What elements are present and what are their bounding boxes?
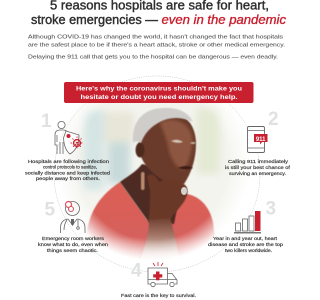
number 5: 5 bbox=[44, 200, 56, 220]
icon: ambulance bbox=[148, 262, 177, 287]
text: Year in and year out, heart bbox=[213, 236, 278, 242]
text: things seem chaotic. bbox=[47, 248, 98, 254]
text: surviving an emergency. bbox=[229, 171, 286, 177]
face highlight bbox=[160, 120, 192, 170]
text: know what to do, even when bbox=[38, 242, 108, 248]
reason 4 bbox=[121, 260, 196, 299]
ear bbox=[136, 142, 144, 158]
reason 2 bbox=[225, 109, 291, 177]
text: Emergency room workers bbox=[42, 236, 105, 242]
text: control protocols to sanitize, bbox=[43, 165, 97, 171]
text bbox=[38, 236, 108, 254]
text: Fast care is the key to survival. bbox=[121, 293, 196, 299]
intro text bbox=[28, 34, 285, 60]
reason 1 bbox=[25, 111, 110, 182]
shirt bbox=[86, 182, 218, 262]
intro text: Although COVID-19 has changed the world, it hasn't changed the fact that hospitals bbox=[28, 34, 283, 40]
earring bbox=[141, 172, 144, 190]
reason 3 bbox=[208, 198, 283, 254]
intro text: Delaying the 911 call that gets you to the hospital can be dangerous — even deadly. bbox=[28, 54, 278, 60]
text: Calling 911 immediately bbox=[228, 159, 289, 165]
icon: bar chart bbox=[234, 211, 261, 234]
number 4: 4 bbox=[131, 260, 142, 282]
neck and chest bbox=[120, 164, 180, 224]
number 1: 1 bbox=[41, 111, 52, 132]
number 2: 2 bbox=[268, 109, 279, 130]
face bbox=[139, 114, 196, 184]
intro text: are the safest place to be if there's a heart attack, stroke or other medical emergency. bbox=[28, 42, 285, 48]
text: two killers worldwide. bbox=[225, 248, 272, 254]
icon: person with shield and virus bbox=[55, 121, 84, 154]
photo: woman resting chin on hand bbox=[68, 103, 238, 258]
red callout banner bbox=[64, 82, 254, 103]
forearm bbox=[142, 218, 178, 258]
dotted circle bbox=[54, 76, 260, 272]
text bbox=[208, 236, 283, 254]
red callout banner: hesitate or doubt you need emergency help. bbox=[80, 94, 238, 101]
eyes and lips bbox=[171, 140, 196, 170]
hand under chin bbox=[147, 174, 188, 222]
grey hair bbox=[133, 108, 193, 143]
red callout banner: Here's why the coronavirus shouldn't make you bbox=[76, 86, 242, 92]
text bbox=[25, 159, 110, 182]
text: Hospitals are following infection bbox=[28, 159, 109, 165]
text: disease and stroke are the top bbox=[208, 242, 283, 248]
text bbox=[225, 159, 291, 177]
text: people away from others. bbox=[36, 176, 100, 182]
title: stroke emergencies — bbox=[31, 13, 158, 27]
title bbox=[31, 0, 287, 27]
icon: doctor with stethoscope bbox=[60, 202, 85, 233]
text: socially distance and keep infected bbox=[25, 170, 110, 176]
text: is still your best chance of bbox=[225, 165, 291, 171]
icon: phone with 911: 911 bbox=[256, 137, 266, 143]
reason 5 bbox=[38, 200, 108, 254]
number 3: 3 bbox=[266, 198, 276, 220]
title: even in the pandemic bbox=[162, 13, 287, 27]
